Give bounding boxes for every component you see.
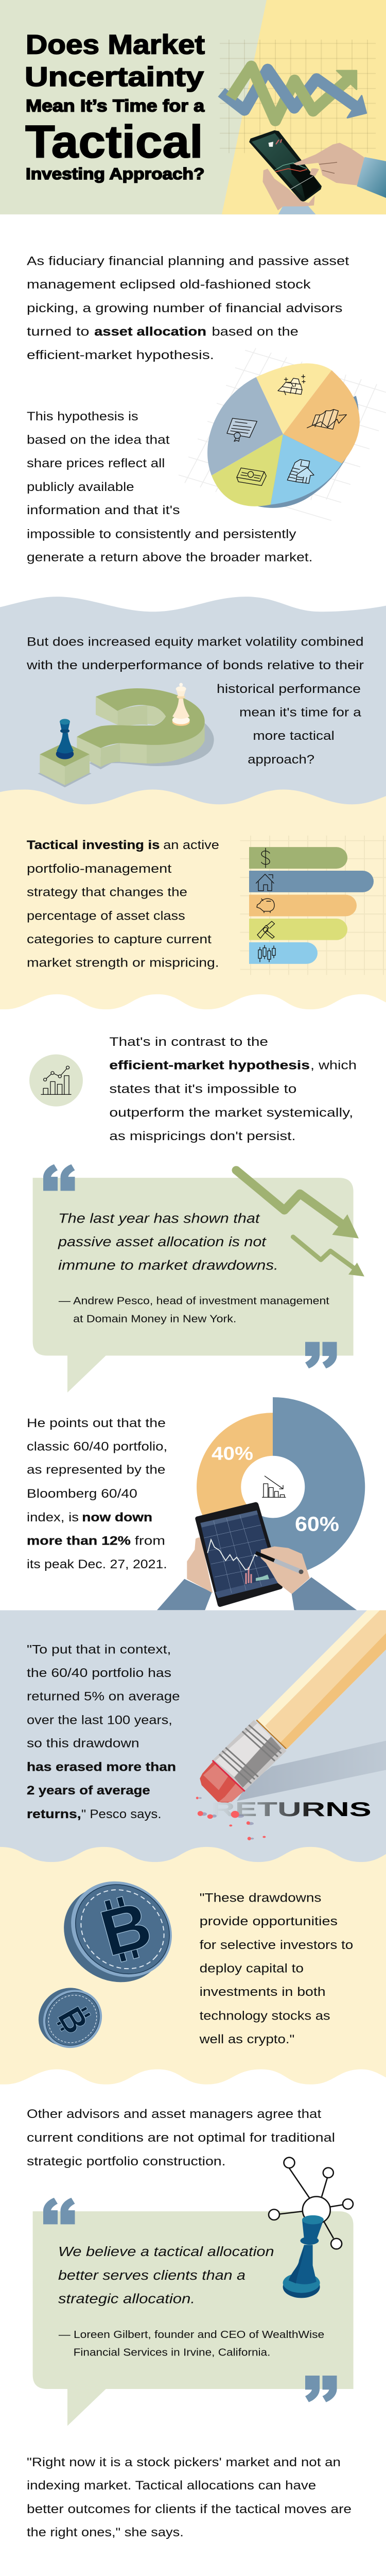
pie chart with asset icons — [179, 348, 386, 520]
icon: large bitcoin coin — [44, 1861, 192, 2002]
icon: small bitcoin coin: B — [50, 2001, 96, 2040]
hypothesis contrast text: states that it's impossible to — [109, 1082, 296, 1096]
quote text: passive asset allocation is not — [58, 1234, 267, 1249]
context text: "To put that in context, — [27, 1643, 171, 1656]
donut chart 60/40 — [197, 1397, 365, 1577]
panel: efficient-market hypothesis — [29, 1035, 357, 1143]
icon: house — [256, 874, 274, 891]
drawdowns quote text: well as crypto." — [199, 2032, 294, 2046]
tactical investing text: percentage of asset class — [27, 909, 185, 923]
intro paragraph — [27, 255, 349, 362]
text block: closing quote: "Right now it is a stock pickers' market and not an — [27, 2455, 341, 2469]
hypothesis contrast text — [109, 1035, 357, 1143]
panel: volatility question — [0, 597, 386, 807]
title: Tactical — [25, 116, 203, 167]
intro paragraph: efficient-market hypothesis. — [27, 348, 214, 362]
60/40 portfolio text: classic 60/40 portfolio, — [27, 1440, 167, 1453]
title: Investing Approach? — [26, 164, 204, 183]
icon: blue chess piece — [283, 2215, 324, 2298]
hypothesis contrast text: That's in contrast to the — [109, 1035, 268, 1049]
icon: candlesticks — [258, 945, 275, 962]
icon: 3D question mark with chess pieces — [38, 683, 214, 787]
hypothesis paragraph — [27, 410, 313, 565]
60/40 portfolio text: its peak Dec. 27, 2021. — [27, 1557, 167, 1571]
callout: Loreen Gilbert quote — [33, 2158, 354, 2426]
icon: pencil erasing RETURNS — [200, 1611, 386, 1803]
icon: hands holding tablet with stock chart — [157, 1502, 357, 1610]
text block: closing quote: indexing market. Tactical allocations can have — [27, 2479, 316, 2493]
context text: has erased more than — [27, 1760, 176, 1774]
icon: certificate — [227, 418, 257, 442]
drawdowns quote text: investments in both — [200, 1985, 326, 1999]
volatility text: historical performance — [217, 682, 361, 696]
callout: Andrew Pesco quote — [33, 1164, 364, 1393]
text block: other advisors: strategic portfolio construction. — [27, 2155, 226, 2168]
icon: opening quote mark — [43, 2198, 75, 2224]
label: 60%: 60% — [295, 1512, 339, 1535]
intro paragraph: asset allocation — [94, 325, 206, 338]
icon: diploma — [257, 921, 275, 938]
volatility text: more tactical — [253, 730, 335, 743]
title: Mean It’s Time for a — [26, 97, 204, 115]
icon: cream chess piece — [172, 683, 190, 726]
context text: returned 5% on average — [27, 1690, 180, 1704]
quote text: better serves clients than a — [58, 2267, 245, 2283]
intro paragraph: turned to — [27, 325, 90, 338]
text block: other advisors: Other advisors and asset managers agree that — [27, 2108, 321, 2121]
tactical investing text: Tactical investing is — [27, 838, 160, 852]
panel: tactical investing — [0, 789, 386, 1009]
intro paragraph: management eclipsed old-fashioned stock — [27, 278, 311, 292]
drawdowns quote text: technology stocks as — [200, 2009, 330, 2023]
quote attribution — [59, 1295, 329, 1325]
erased word RETURNS — [196, 1797, 372, 1840]
60/40 portfolio text: from — [135, 1534, 165, 1548]
icon: network of nodes — [269, 2158, 353, 2249]
context text: 2 years of average — [27, 1784, 150, 1798]
icon: house and building — [287, 460, 314, 483]
title — [25, 29, 205, 183]
icon: large bitcoin coin: B — [93, 1888, 159, 1970]
title: Does Market — [26, 29, 205, 60]
quote attribution: at Domain Money in New York. — [73, 1313, 236, 1325]
quote text: strategic allocation. — [58, 2291, 195, 2306]
tactical investing text: an active — [163, 838, 219, 852]
icon: opening quote mark — [43, 1164, 75, 1191]
60/40 portfolio text: more than 12% — [27, 1534, 131, 1548]
hypothesis paragraph: based on the idea that — [27, 433, 170, 447]
hypothesis paragraph: generate a return above the broader market. — [27, 551, 313, 565]
60/40 portfolio text: Bloomberg 60/40 — [27, 1487, 137, 1501]
title: Uncertainty — [25, 62, 204, 92]
intro paragraph: picking, a growing number of financial advisors — [27, 301, 342, 315]
text block: closing quote — [27, 2455, 352, 2539]
volatility text: But does increased equity market volatility combined — [27, 635, 363, 649]
text block: closing quote: better outcomes for clients if the tactical moves are — [27, 2502, 352, 2516]
label: 40%: 40% — [212, 1443, 253, 1464]
panel: crypto opportunities — [0, 1847, 386, 2084]
drawdowns quote text: "These drawdowns — [200, 1891, 321, 1905]
60/40 portfolio text: as represented by the — [27, 1463, 165, 1477]
intro paragraph: As fiduciary financial planning and passive asset — [27, 255, 349, 268]
tactical investing text: portfolio-management — [27, 862, 171, 876]
drawdowns quote text: provide opportunities — [200, 1915, 338, 1928]
icon: chart in circle — [29, 1054, 83, 1107]
hypothesis paragraph: This hypothesis is — [27, 410, 138, 423]
hypothesis paragraph: impossible to consistently and persistently — [27, 528, 296, 541]
icon: falling arrows — [236, 1170, 364, 1277]
header panel — [0, 0, 386, 214]
quote attribution: — Loreen Gilbert, founder and CEO of WealthWise — [59, 2329, 324, 2341]
icon: zigzag market arrows — [221, 66, 366, 121]
intro paragraph: based on the — [212, 325, 299, 338]
icon: piggy bank — [257, 899, 274, 913]
quote text: immune to market drawdowns. — [58, 1258, 278, 1273]
icon: small bitcoin coin — [26, 1976, 114, 2060]
erased word RETURNS: RETURNS — [211, 1798, 372, 1821]
context text: " Pesco says. — [81, 1807, 162, 1821]
drawdowns quote text: for selective investors to — [200, 1938, 353, 1952]
icon: dollar — [261, 848, 270, 868]
hypothesis contrast text: as mispricings don't persist. — [109, 1129, 296, 1143]
hypothesis paragraph: share prices reflect all — [27, 457, 165, 470]
text block: other advisors: current conditions are not optimal for traditional — [27, 2131, 335, 2145]
hypothesis paragraph: information and that it's — [27, 503, 180, 517]
icon: growth chart — [307, 410, 346, 429]
context text — [27, 1643, 180, 1821]
quote text — [58, 2244, 274, 2306]
hypothesis contrast text: efficient-market hypothesis — [109, 1059, 310, 1073]
text block: closing quote: the right ones," she says. — [27, 2526, 184, 2539]
icon: closing quote mark — [305, 1342, 337, 1368]
drawdowns quote text: deploy capital to — [200, 1962, 304, 1975]
panel: 60/40 portfolio — [27, 1397, 365, 1610]
tactical investing text — [27, 838, 219, 970]
hypothesis contrast text: , which — [310, 1059, 357, 1073]
60/40 portfolio text: He points out that the — [27, 1416, 166, 1430]
60/40 portfolio text: index, is — [27, 1511, 79, 1524]
context text: so this drawdown — [27, 1737, 139, 1751]
icon: hands holding smartphone — [249, 130, 386, 214]
60/40 portfolio text — [27, 1416, 167, 1571]
quote attribution: Financial Services in Irvine, California. — [74, 2347, 270, 2359]
icon: blue chess piece — [56, 719, 74, 759]
volatility text: approach? — [248, 753, 314, 767]
hypothesis contrast text: outperform the market systemically, — [109, 1106, 353, 1120]
context text: returns, — [27, 1807, 81, 1821]
volatility text: mean it's time for a — [239, 706, 361, 719]
icon: falling bar chart — [262, 1476, 286, 1497]
text block: other advisors — [27, 2108, 335, 2168]
quote text: The last year has shown that — [58, 1211, 260, 1226]
icon: banknotes — [237, 468, 266, 486]
context text: the 60/40 portfolio has — [27, 1666, 171, 1680]
quote text: We believe a tactical allocation — [58, 2244, 274, 2259]
icon: gold bars — [278, 375, 305, 395]
hypothesis paragraph: publicly available — [27, 480, 134, 494]
60/40 portfolio text: now down — [82, 1511, 152, 1524]
drawdowns quote text — [199, 1891, 353, 2046]
quote attribution — [59, 2329, 324, 2359]
icon: closing quote mark — [305, 2376, 337, 2402]
horizontal bar chart with icons — [240, 836, 386, 975]
tactical investing text: market strength or mispricing. — [27, 956, 219, 970]
tactical investing text: categories to capture current — [27, 933, 212, 946]
panel: intro text and pie chart — [27, 255, 386, 565]
context text: over the last 100 years, — [27, 1714, 172, 1727]
quote attribution: — Andrew Pesco, head of investment management — [59, 1295, 329, 1307]
volatility text — [26, 635, 364, 767]
tactical investing text: strategy that changes the — [27, 886, 187, 900]
panel: context for drawdown — [0, 1611, 386, 1866]
volatility text: with the underperformance of bonds relative to their — [26, 658, 364, 672]
quote text — [58, 1211, 278, 1273]
